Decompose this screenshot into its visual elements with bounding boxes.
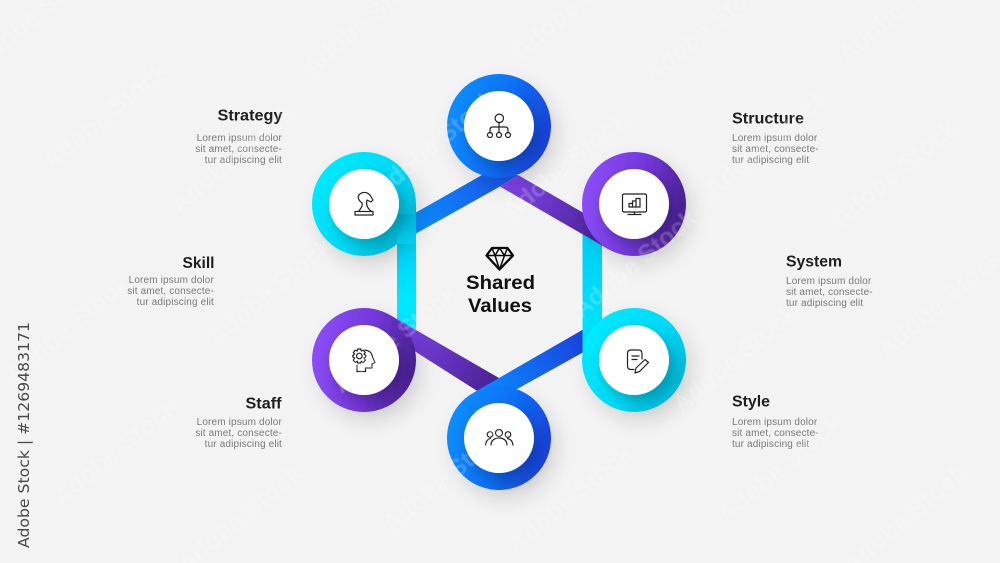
band: blue lower right [473, 326, 590, 400]
stock watermarks: Adobe Stock [667, 299, 802, 419]
label: Staff: Staff [246, 396, 282, 412]
stock watermarks: Adobe Stock [37, 56, 172, 176]
node: top ring [447, 74, 551, 178]
label: Strategy: Strategy [218, 108, 283, 124]
label: Strategy: sit amet, consecte- [195, 144, 282, 155]
stock watermarks: Adobe Stock [165, 99, 300, 219]
center title: Shared Values [466, 248, 535, 317]
icon: note with pencil [628, 350, 648, 373]
label: Structure: Structure [732, 110, 804, 128]
stock watermarks: Adobe Stock [712, 409, 847, 529]
label: Skill: tur adipiscing elit [137, 297, 214, 308]
label: Structure [732, 110, 819, 166]
label: Skill [127, 255, 215, 308]
node: Staff ring [312, 308, 416, 412]
stock watermarks: Adobe Stock [497, 106, 632, 226]
white disc: Staff [329, 325, 399, 395]
stock watermarks: Adobe Stock [502, 439, 637, 559]
vertical stock id: Adobe Stock | #1269483171 [15, 322, 33, 548]
label: System [786, 254, 873, 309]
stock watermarks: Adobe Stock [202, 232, 337, 352]
band: blue upper left [408, 175, 518, 238]
label: Strategy: tur adipiscing elit [205, 155, 282, 166]
white disc: Style [599, 325, 669, 395]
stock watermarks: Adobe Stock [367, 84, 502, 204]
band: cyan left vertical [397, 204, 416, 345]
white disc: bottom [464, 403, 534, 473]
label: Style: tur adipiscing elit [732, 439, 809, 450]
label: Style: sit amet, consecte- [732, 428, 819, 439]
label: System: tur adipiscing elit [786, 298, 863, 309]
label: Staff: Lorem ipsum dolor [197, 417, 283, 428]
stock watermarks: Adobe Stock [327, 279, 462, 399]
label: Structure: Lorem ipsum dolor [732, 133, 818, 144]
label: Style: Lorem ipsum dolor [732, 417, 818, 428]
icon: org hierarchy [488, 114, 510, 138]
label: System: sit amet, consecte- [786, 287, 873, 298]
stock watermarks: Adobe Stock [0, 269, 134, 389]
center title: Shared Values: Values [468, 295, 532, 317]
band: cyan left vertical cover [397, 214, 416, 244]
stock watermarks: Adobe Stock [699, 84, 834, 204]
label: Style [732, 394, 819, 450]
label: System: System [786, 254, 842, 270]
white disc: Strategy [329, 169, 399, 239]
band: cyan right vertical [582, 225, 602, 360]
stock watermarks: Adobe Stock [567, 204, 702, 324]
label: Structure: sit amet, consecte- [732, 144, 819, 155]
label: Skill: Skill [182, 255, 214, 272]
center title: Shared Values: Shared [466, 272, 535, 294]
stock watermarks: Adobe Stock [47, 392, 182, 512]
label: System: Lorem ipsum dolor [786, 276, 872, 287]
label: Staff: tur adipiscing elit [205, 439, 282, 450]
white disc: top [464, 91, 534, 161]
icon: three people [486, 430, 513, 445]
label: Strategy: Lorem ipsum dolor [197, 133, 283, 144]
label: Staff: sit amet, consecte- [195, 428, 282, 439]
band: purple lower left [390, 315, 499, 394]
icon: diamond [486, 248, 513, 270]
white disc: Structure [599, 169, 669, 239]
node: Style ring [582, 308, 686, 412]
label: Style: Style [732, 394, 770, 410]
label: Structure: tur adipiscing elit [732, 155, 809, 166]
icon: chess knight [355, 192, 373, 215]
icon: monitor chart [622, 194, 646, 214]
node: Structure ring [582, 152, 686, 256]
label: Skill: Lorem ipsum dolor [129, 275, 215, 286]
icon: head with gear [353, 349, 375, 372]
node: Strategy ring [312, 152, 416, 256]
band: purple upper right [500, 175, 608, 249]
label: Strategy [195, 108, 283, 166]
stock watermarks: Adobe Stock [827, 114, 962, 234]
node: bottom ring [447, 386, 551, 490]
label: Skill: sit amet, consecte- [127, 286, 214, 297]
label: Staff [195, 396, 283, 450]
stock watermarks: Adobe Stock [377, 419, 512, 539]
